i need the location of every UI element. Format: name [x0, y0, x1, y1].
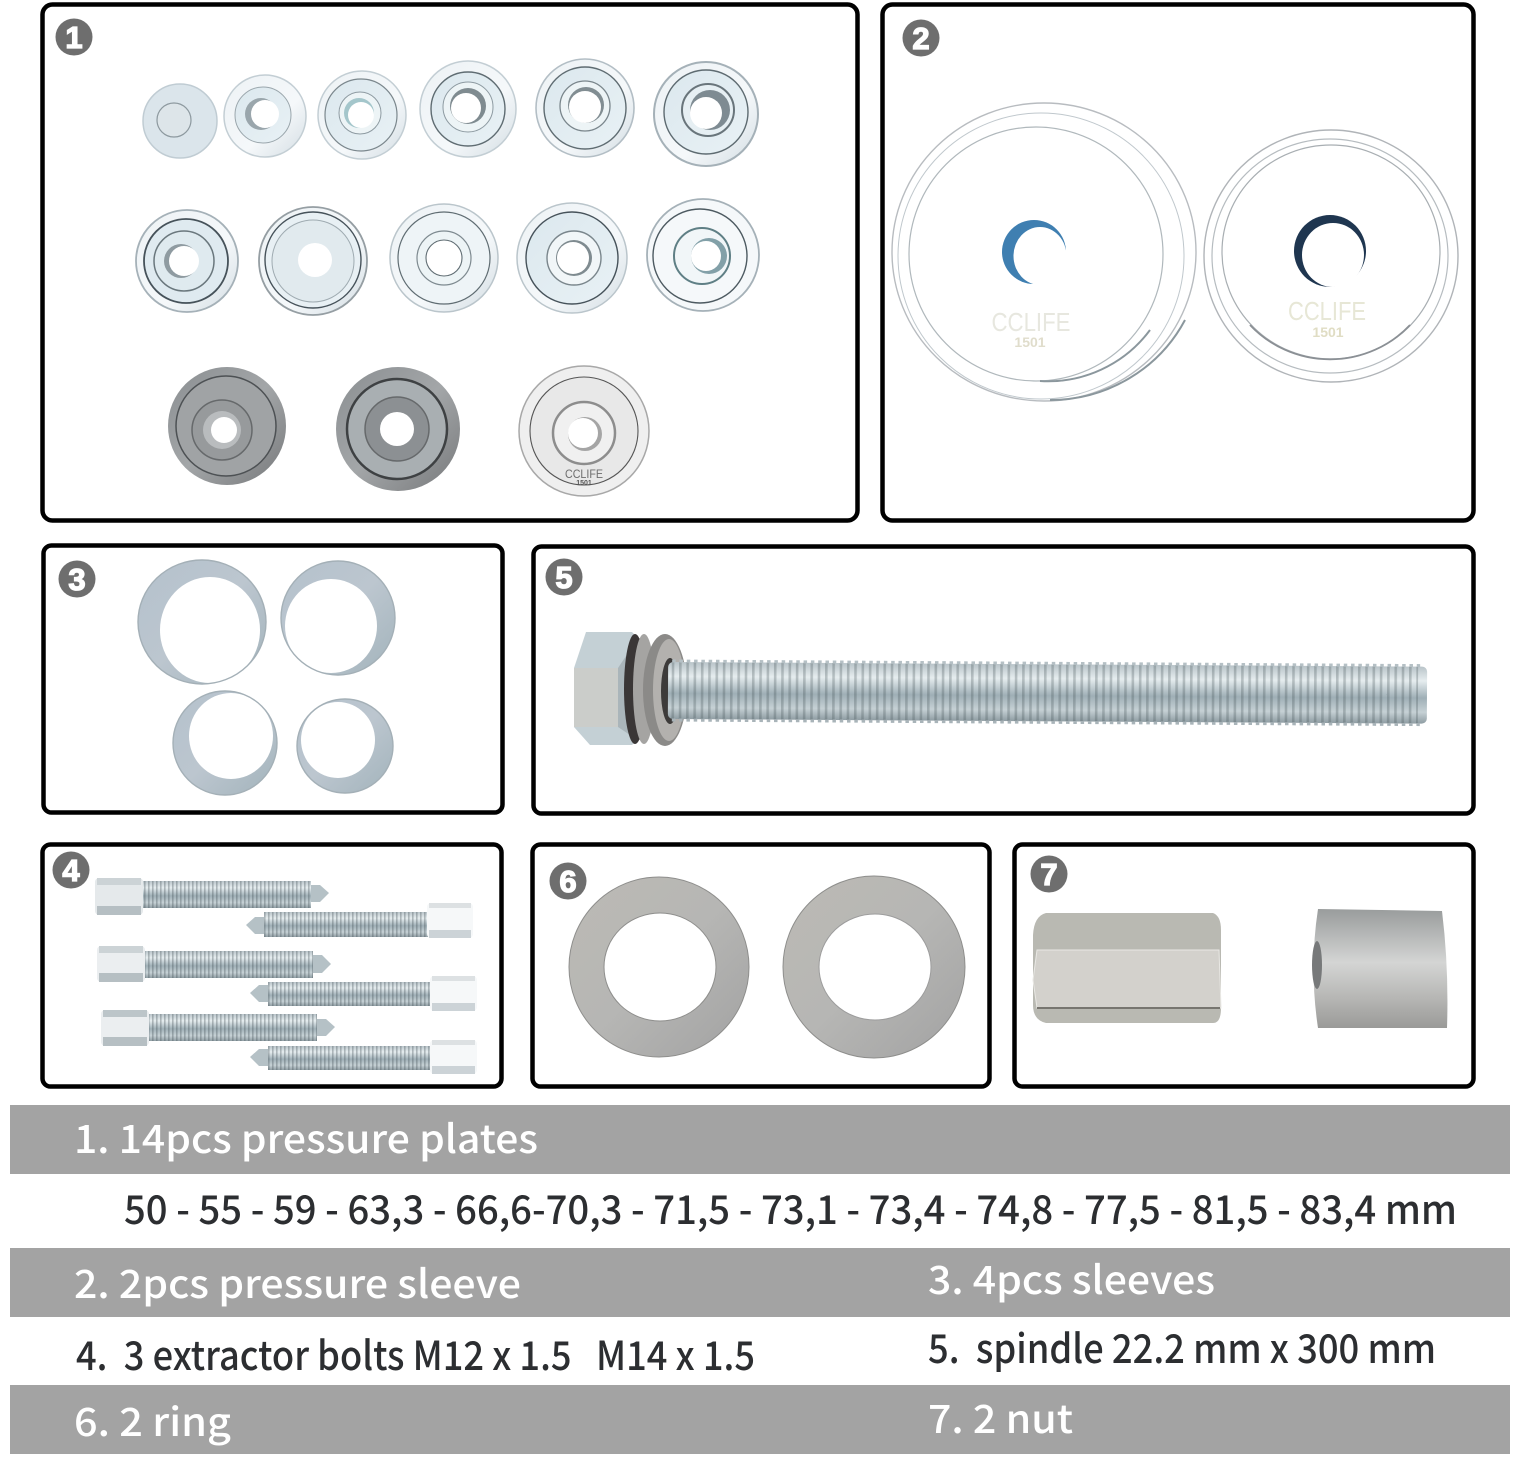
panel 7: nuts: [1014, 844, 1474, 1086]
plate 3: [318, 71, 406, 159]
round nut: [1312, 909, 1447, 1028]
small sleeve: CCLIFE: [1288, 296, 1366, 326]
large sleeve: 1501: [1014, 334, 1046, 350]
badge 3: 3: [68, 562, 86, 597]
badge 4: [52, 852, 90, 888]
panel 2: pressure sleeves: [882, 4, 1474, 520]
badge 5: 5: [555, 560, 573, 595]
plate 1: [143, 84, 217, 158]
plate 4: [420, 61, 516, 157]
plate 6: [654, 62, 758, 166]
band: sleeves headings: 3. 4pcs sleeves: [928, 1250, 1215, 1306]
badge 7: [1030, 856, 1068, 892]
spindle text: 5. spindle 22.2 mm x 300 mm: [928, 1317, 1436, 1375]
plate 9: [390, 204, 498, 312]
panel 1: pressure plates: [42, 4, 858, 520]
plate 14 with logo: CCLIFE: [565, 467, 603, 481]
plate 12 dark: [168, 367, 286, 485]
badge 2: 2: [912, 21, 930, 56]
badge 1: [56, 18, 92, 56]
extractor bolt 4: [250, 976, 477, 1011]
large sleeve: CCLIFE: [992, 307, 1070, 337]
panel 3: sleeves: [44, 546, 502, 812]
plate 7: [136, 210, 238, 312]
sleeve ring 4: [297, 699, 393, 793]
plate 11: [647, 199, 759, 311]
spindle bolt: [574, 632, 1427, 746]
badge 7: 7: [1040, 857, 1058, 892]
band: ring and nut headings: 7. 2 nut: [928, 1389, 1073, 1445]
extractor bolt 3: [97, 946, 331, 982]
sleeve ring 2: [281, 561, 395, 675]
extractor bolt 1: [95, 878, 329, 915]
sleeve ring 1: [138, 560, 266, 684]
plate 8: [259, 207, 367, 315]
band: sleeves headings: [10, 1248, 1510, 1317]
band: ring and nut headings: [10, 1385, 1510, 1454]
badge 5: [546, 558, 582, 596]
badge 6: [550, 862, 586, 900]
plate 10: [517, 203, 627, 313]
plate 14 with logo: 1501: [576, 480, 592, 487]
small sleeve: [1204, 130, 1458, 382]
panel 5: spindle: [534, 546, 1474, 814]
badge 3: [58, 560, 96, 598]
extractor bolts text: 4. 3 extractor bolts M12 x 1.5 M14 x 1.5: [76, 1324, 755, 1382]
ring washer 2: [783, 876, 965, 1058]
plate 5: [536, 59, 634, 157]
band: pressure plates heading: 1. 14pcs pressure plates: [74, 1109, 538, 1165]
panel 4: extractor bolts: [42, 844, 502, 1086]
badge 4: 4: [62, 853, 80, 888]
ring washer 1: [569, 877, 749, 1057]
sizes list: 50 - 55 - 59 - 63,3 - 66,6-70,3 - 71,5 - 73,1 - 73,4 - 74,8 - 77,5 - 81,5 - 83,4 mm: [124, 1178, 1457, 1236]
band: pressure plates heading: [10, 1105, 1510, 1174]
large sleeve: [892, 103, 1196, 401]
plate 13 dark: [336, 367, 460, 491]
badge 2: [902, 20, 940, 56]
plate 14 with logo: [519, 366, 649, 496]
band: sleeves headings: 2. 2pcs pressure sleeve: [74, 1254, 521, 1310]
badge 6: 6: [559, 864, 577, 899]
plate 2: [224, 75, 306, 157]
sleeve ring 3: [173, 691, 277, 795]
badge 1: 1: [65, 20, 83, 55]
panel 6: rings: [532, 844, 990, 1086]
band: ring and nut headings: 6. 2 ring: [74, 1392, 231, 1448]
extractor bolt 6: [250, 1040, 477, 1074]
extractor bolt 5: [101, 1010, 335, 1046]
hex nut: [1033, 913, 1221, 1023]
small sleeve: 1501: [1312, 324, 1344, 340]
extractor bolt 2: [246, 903, 473, 938]
